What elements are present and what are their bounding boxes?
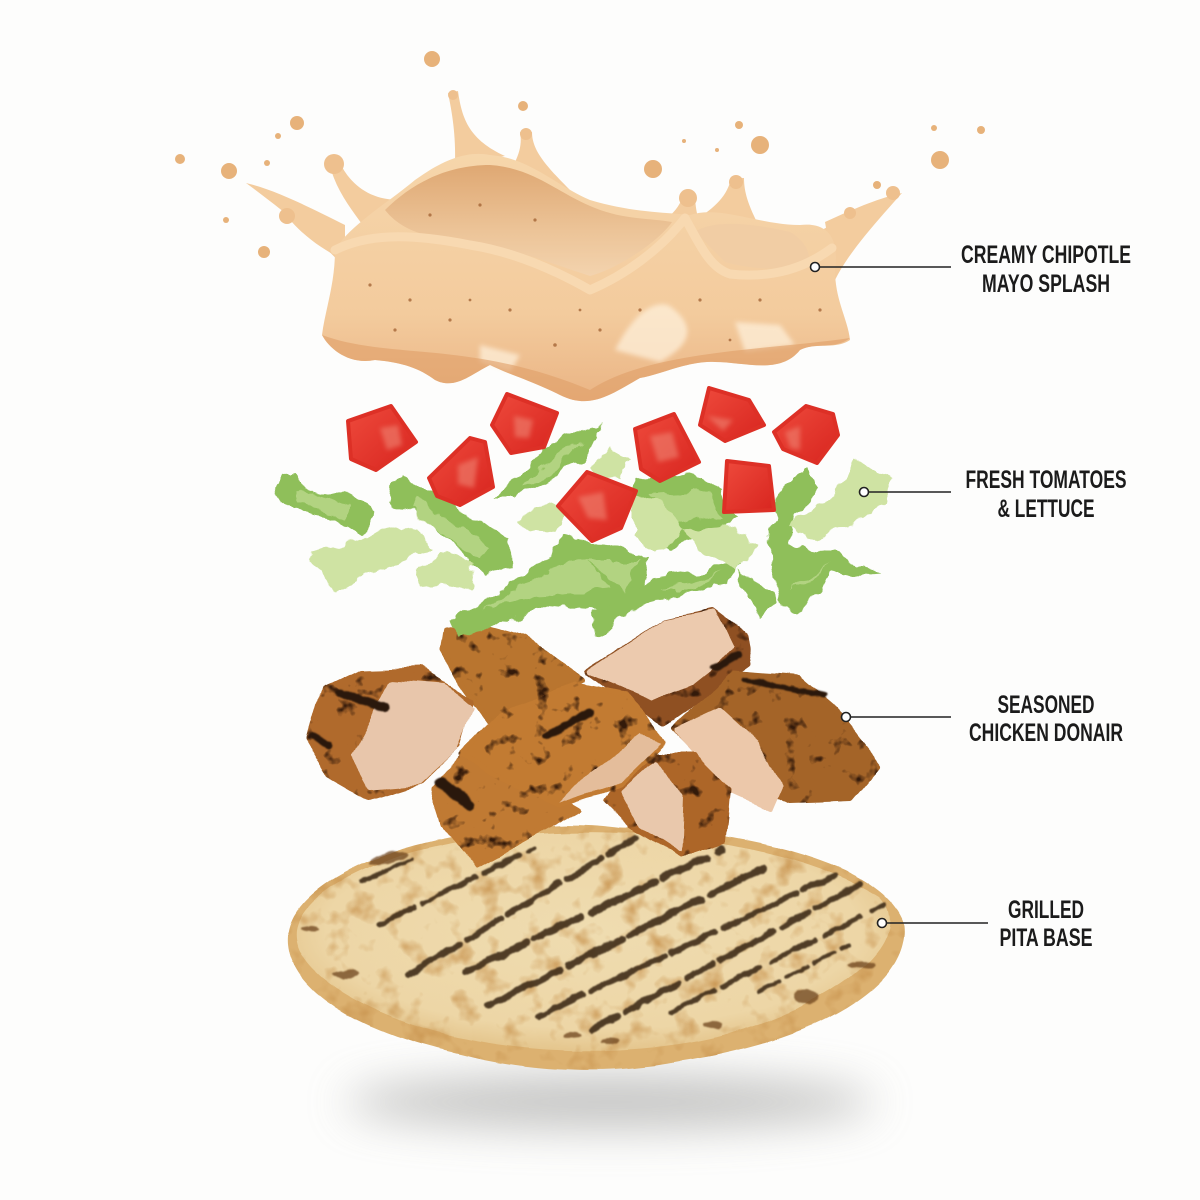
chicken donair pieces [308, 612, 878, 866]
splash droplets [175, 51, 985, 258]
chicken: center flesh [560, 735, 661, 803]
label: chicken: CHICKEN DONAIR [969, 719, 1123, 747]
chicken: back right flesh [590, 613, 733, 698]
label: mayo: MAYO SPLASH [982, 270, 1110, 298]
label: pita: PITA BASE [1000, 924, 1092, 952]
chicken: left flesh [355, 682, 470, 786]
chicken: bottom left [434, 758, 580, 866]
diced tomatoes [348, 388, 838, 541]
pita base [288, 825, 904, 1070]
mayo splash [175, 51, 985, 401]
spice flecks [368, 203, 822, 347]
shredded lettuce [272, 423, 893, 640]
tendril beads [279, 90, 900, 224]
chicken: char marks [312, 655, 825, 805]
callout: mayo splash [810, 241, 1131, 298]
chicken: lower flesh [622, 762, 680, 850]
splash inner bowl [385, 165, 672, 276]
chicken: back left [442, 625, 582, 722]
chicken: back right crust [588, 612, 750, 725]
splash lower shading [322, 335, 850, 401]
callout: pita [878, 896, 1092, 952]
label: tomatoes: & LETTUCE [998, 495, 1094, 523]
splash right bowl [695, 224, 809, 269]
label: pita: GRILLED [1008, 896, 1084, 924]
label: chicken: SEASONED [998, 691, 1094, 719]
chicken: lower crust [605, 755, 730, 855]
splash tapered arms [246, 91, 902, 280]
chicken: center [462, 685, 663, 805]
splash rim [335, 218, 832, 290]
callout: tomatoes and lettuce [860, 466, 1126, 523]
pita shadow [345, 1076, 875, 1128]
callout: chicken [842, 691, 1123, 747]
splash highlights [480, 304, 795, 372]
splash body [322, 154, 850, 401]
chicken: right flesh [677, 712, 780, 808]
label: tomatoes: FRESH TOMATOES [966, 466, 1126, 494]
chicken: left crust [308, 670, 470, 798]
chicken: right crust [675, 675, 878, 800]
label: mayo: CREAMY CHIPOTLE [961, 241, 1131, 269]
